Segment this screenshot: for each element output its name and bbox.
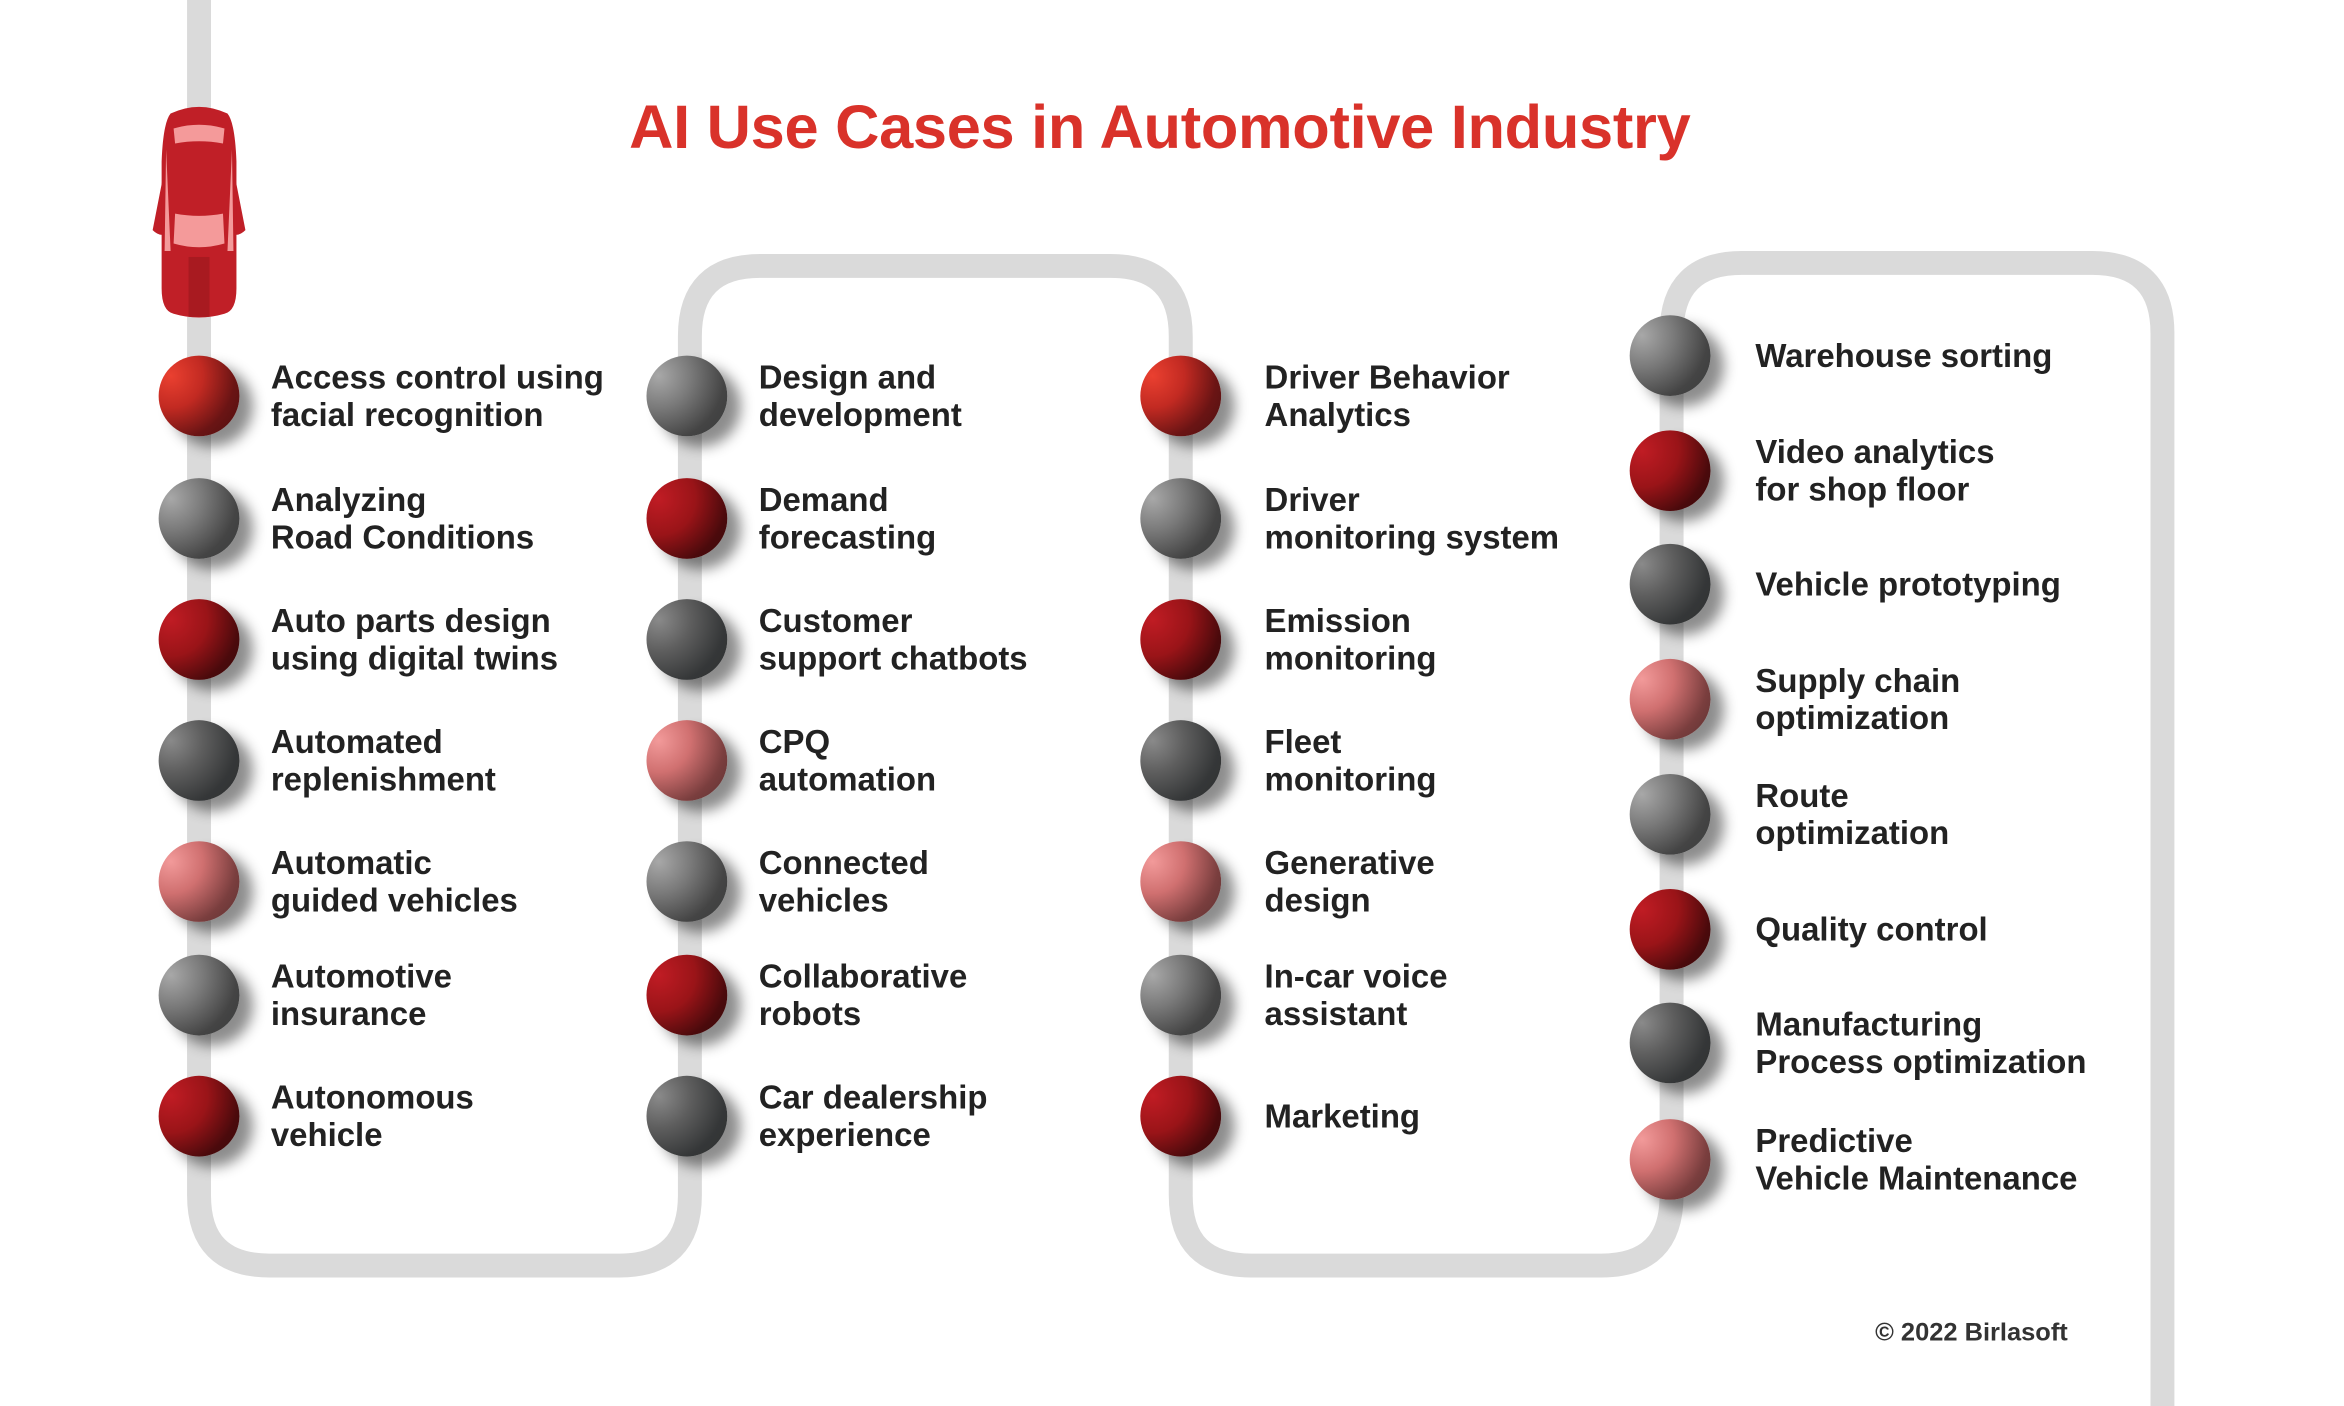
item: supply chain <box>1630 658 1960 758</box>
panel: column 2: automation <box>759 761 936 798</box>
panel: column 4: Manufacturing <box>1755 1006 1982 1043</box>
panel: column 3: design <box>1265 882 1371 919</box>
panel: column 4: optimization <box>1755 814 1949 852</box>
item: manufacturing <box>1630 1002 2087 1102</box>
item: dealership <box>646 1076 987 1176</box>
panel: column 3: Fleet <box>1265 723 1341 761</box>
item: predictive <box>1630 1119 2077 1219</box>
panel: column 1: Analyzing <box>271 481 426 518</box>
title: AI Use Cases in Automotive Industry <box>629 93 1690 161</box>
item: connected <box>646 841 929 941</box>
panel: column 2: support chatbots <box>759 640 1028 677</box>
panel: column 4: optimization <box>1755 699 1949 737</box>
panel: column 3: assistant <box>1265 995 1407 1032</box>
panel: column 3 <box>1140 356 1559 1176</box>
item: fleet <box>1140 720 1436 820</box>
item: cobots <box>646 954 967 1054</box>
item: road conditions <box>158 478 534 578</box>
panel: column 4 <box>1630 315 2087 1219</box>
panel: column 1: Automotive <box>271 958 452 995</box>
copyright: © 2022 Birlasoft <box>1875 1318 2068 1346</box>
panel: column 3: In-car voice <box>1265 958 1448 995</box>
panel: column 4: Supply chain <box>1755 662 1960 699</box>
item: emission <box>1140 599 1436 699</box>
item: chatbots <box>646 599 1028 699</box>
panel: column 3: Driver Behavior <box>1265 359 1510 396</box>
panel: column 1 <box>158 356 604 1176</box>
panel: column 3: Analytics <box>1265 396 1411 433</box>
panel: column 2: experience <box>759 1116 931 1153</box>
panel: column 1: insurance <box>271 995 426 1032</box>
panel: column 1: facial recognition <box>271 396 543 433</box>
panel: column 3: Generative <box>1265 844 1435 882</box>
panel: column 2: CPQ <box>759 723 830 761</box>
panel: column 4: Predictive <box>1755 1122 1913 1159</box>
icon: car <box>152 106 246 318</box>
item: voice <box>1140 954 1448 1054</box>
panel: column 4: Route <box>1755 777 1849 814</box>
panel: column 4: Quality control <box>1755 911 1988 948</box>
panel: column 2: Collaborative <box>759 958 967 995</box>
item: route <box>1630 774 1949 874</box>
panel: column 4: Warehouse sorting <box>1755 337 2052 374</box>
panel: column 4: Vehicle Maintenance <box>1755 1159 2077 1197</box>
item: warehouse <box>1630 315 2052 415</box>
panel: column 2: forecasting <box>759 518 936 556</box>
panel: column 1: Autonomous <box>271 1079 474 1116</box>
panel: column 1: Automatic <box>271 844 432 882</box>
item: access control <box>158 356 604 456</box>
item: CPQ <box>646 720 936 820</box>
panel: column 2: robots <box>759 995 861 1032</box>
panel: column 3: Emission <box>1265 602 1411 640</box>
panel: column 1: Access control using <box>271 359 604 396</box>
item: auto parts <box>158 599 558 699</box>
item: design <box>646 356 962 456</box>
panel: column 1: using digital twins <box>271 640 558 677</box>
panel: column 2: Demand <box>759 481 889 518</box>
item: driver behavior <box>1140 356 1510 456</box>
panel: column 1: Road Conditions <box>271 518 534 556</box>
panel: column 4: for shop floor <box>1755 471 1969 508</box>
item: autonomous <box>158 1076 474 1176</box>
item: prototyping <box>1630 544 2061 644</box>
panel: column 1: guided vehicles <box>271 882 518 919</box>
panel: column 2: Design and <box>759 359 936 396</box>
panel: column 1: Automated <box>271 723 443 761</box>
panel: column 3: Marketing <box>1265 1097 1420 1135</box>
panel: column 3: monitoring system <box>1265 518 1559 556</box>
panel: column 2 <box>646 356 1028 1176</box>
item: video <box>1630 430 1995 530</box>
item: replenishment <box>158 720 496 820</box>
panel: column 4: Process optimization <box>1755 1043 2087 1080</box>
item: quality <box>1630 889 1988 989</box>
item: insurance <box>158 954 452 1054</box>
panel: column 2: vehicles <box>759 882 889 919</box>
item: demand <box>646 478 936 578</box>
panel: column 3: monitoring <box>1265 640 1436 677</box>
item: driver monitoring <box>1140 478 1559 578</box>
panel: column 4: Vehicle prototyping <box>1755 566 2061 603</box>
panel: column 3: Driver <box>1265 481 1360 518</box>
panel: column 4: Video analytics <box>1755 433 1995 471</box>
panel: column 2: development <box>759 396 962 433</box>
item: marketing <box>1140 1076 1420 1176</box>
panel: column 1: Auto parts design <box>271 602 551 640</box>
panel: column 2: Customer <box>759 602 912 640</box>
panel: column 1: vehicle <box>271 1116 383 1153</box>
item: AGV <box>158 841 518 941</box>
panel: column 2: Connected <box>759 844 929 882</box>
item: generative <box>1140 841 1435 941</box>
panel: column 2: Car dealership <box>759 1079 987 1116</box>
panel: column 1: replenishment <box>271 761 496 798</box>
panel: column 3: monitoring <box>1265 761 1436 798</box>
